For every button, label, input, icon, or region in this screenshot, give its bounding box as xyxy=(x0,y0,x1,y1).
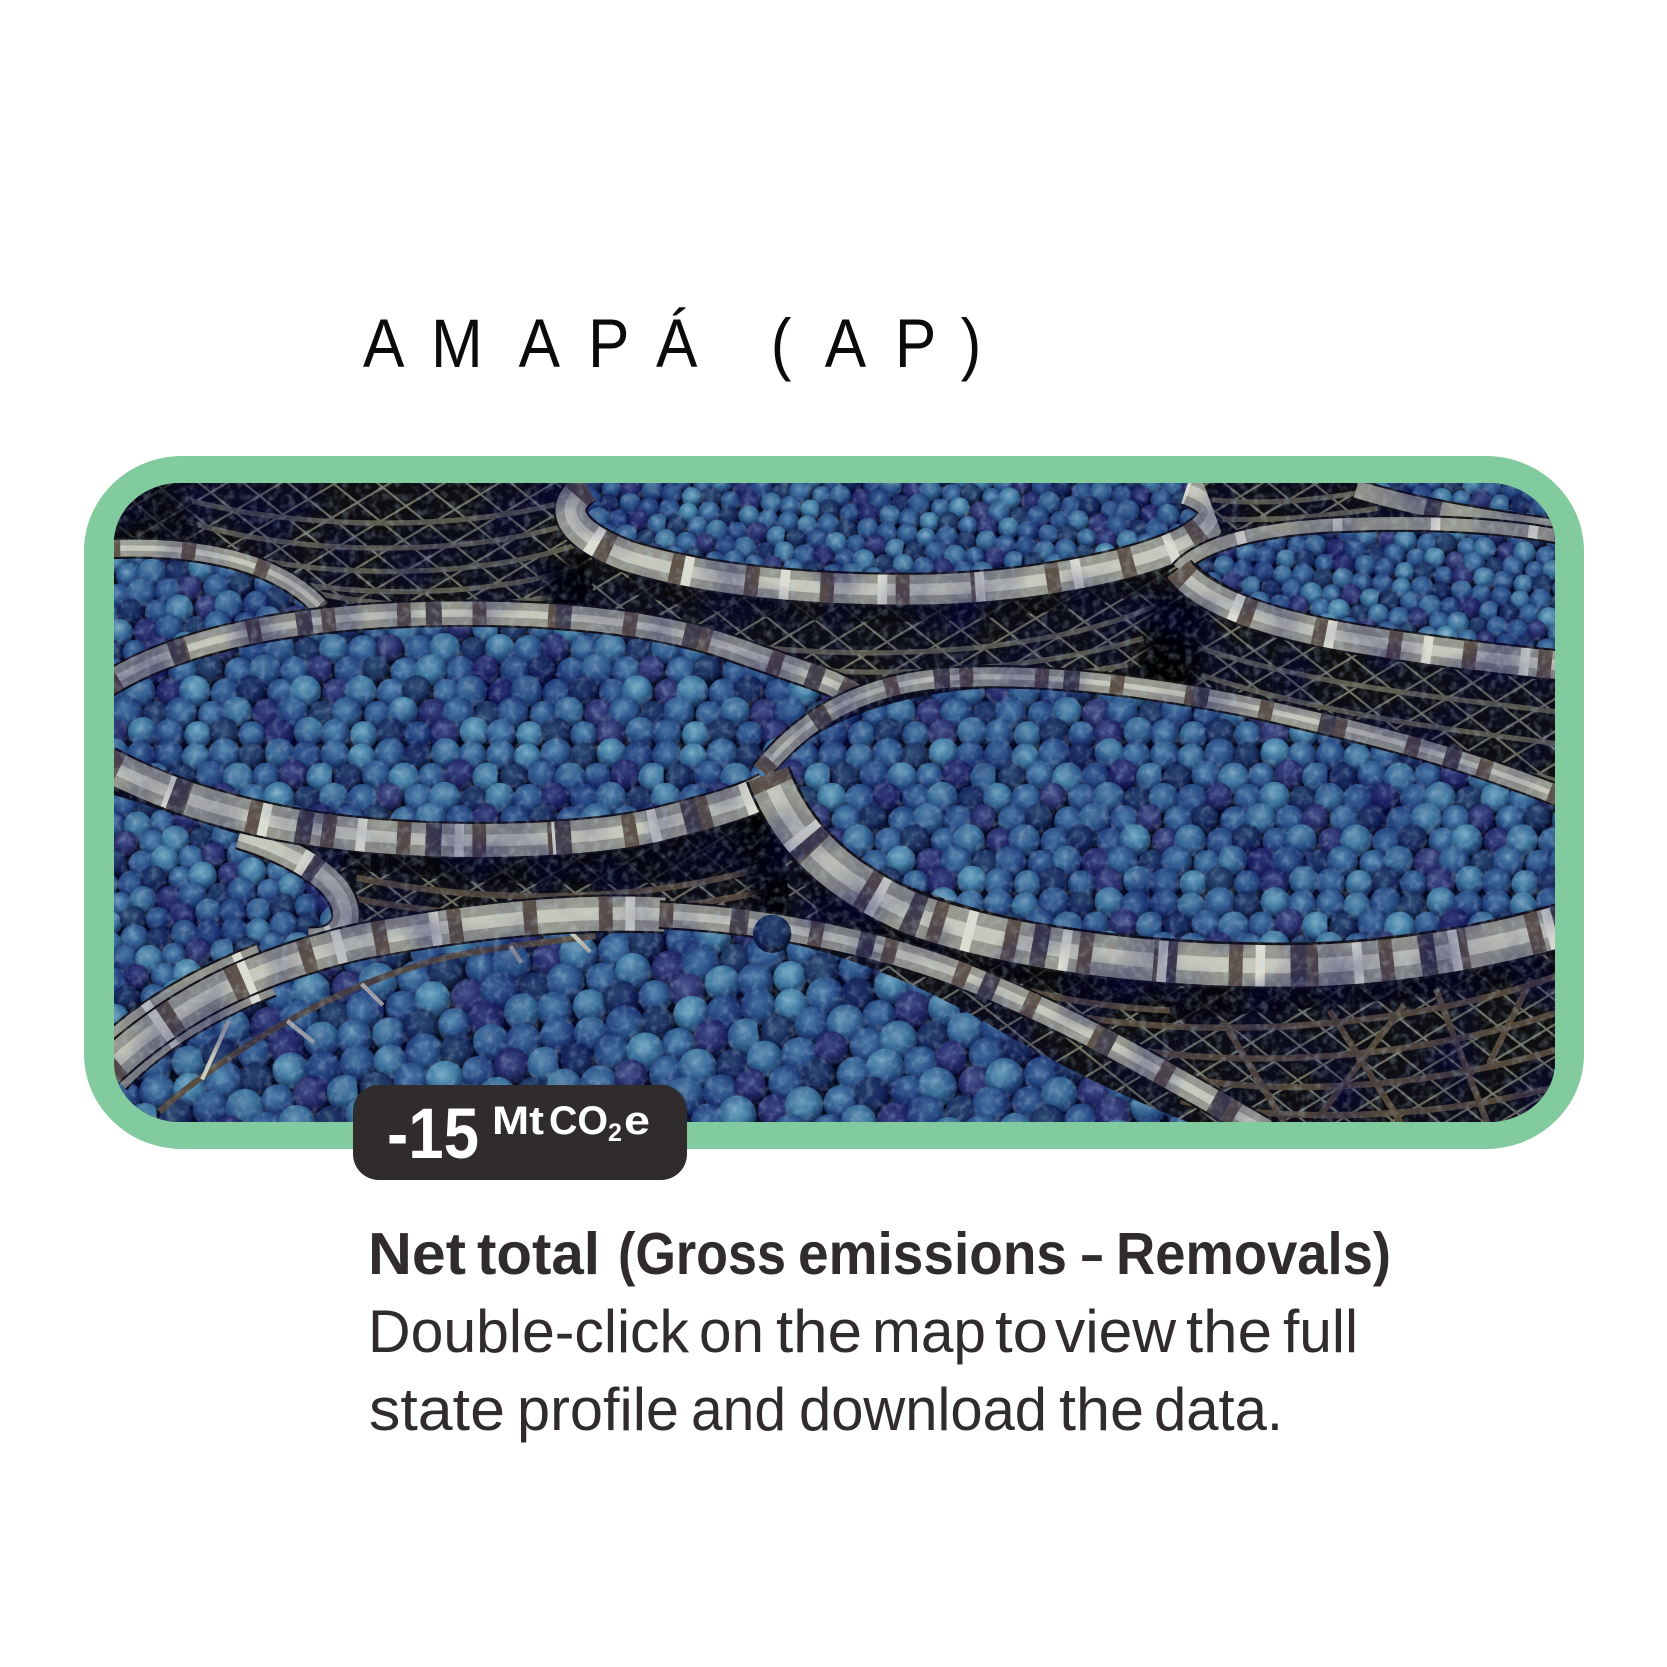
text block: instructions: download xyxy=(799,1376,1047,1443)
woven basket body: top centre xyxy=(590,558,1178,681)
basket rim: bottom basket xyxy=(106,914,1266,1132)
text block: instructions: the xyxy=(776,1298,862,1365)
text block: instructions: the xyxy=(1186,1298,1272,1365)
heading: net total: (Gross xyxy=(618,1221,786,1287)
text block: instructions: state xyxy=(369,1376,505,1443)
text block: instructions: the xyxy=(1059,1376,1144,1443)
text block: instructions: map xyxy=(872,1298,986,1365)
heading: net total: total xyxy=(477,1221,600,1287)
text block: instructions: and xyxy=(691,1376,786,1443)
basket rim: top centre xyxy=(570,487,1214,611)
text block: instructions: profile xyxy=(517,1376,679,1443)
panel: green photo frame xyxy=(84,456,1584,1149)
value unit: Mt xyxy=(492,1099,544,1143)
far right basket xyxy=(1202,479,1563,537)
berries: main left basket xyxy=(114,627,830,822)
text block: instructions: on xyxy=(699,1298,764,1365)
heading: net total: Removals) xyxy=(1116,1221,1391,1287)
top right basket xyxy=(1165,515,1555,782)
berries: top left basket xyxy=(114,538,328,664)
basket rims: large right basket xyxy=(762,677,1563,966)
text block: instructions: to xyxy=(995,1298,1048,1365)
value badge xyxy=(353,1085,687,1180)
berries: bottom basket xyxy=(106,925,1202,1127)
text block: instructions: Double-click xyxy=(368,1298,690,1365)
woven basket: top left xyxy=(114,483,594,606)
berries: large right basket xyxy=(776,687,1563,948)
basket rims: main left basket xyxy=(106,613,856,840)
value unit: e xyxy=(624,1099,650,1143)
heading: net total: Net xyxy=(368,1221,466,1287)
text block: instructions xyxy=(368,1298,1358,1443)
value number: -15 xyxy=(387,1095,479,1174)
value unit: CO xyxy=(549,1099,608,1143)
woven basket body: centre left xyxy=(340,814,790,922)
heading: net total: emissions xyxy=(798,1221,1067,1287)
berries: top centre basket xyxy=(584,483,1196,573)
berries: left middle basket xyxy=(114,794,360,1024)
woven basket body: large right xyxy=(784,850,1555,1122)
text block: instructions: full xyxy=(1283,1298,1358,1365)
text block: instructions: view xyxy=(1055,1298,1177,1365)
photo: baskets of acai berries xyxy=(114,483,1555,1122)
value unit: 2 xyxy=(608,1119,622,1147)
title: AMAPÁ(AP) xyxy=(363,305,981,382)
heading: net total: – xyxy=(1081,1221,1103,1287)
text block: instructions: data. xyxy=(1154,1376,1283,1443)
